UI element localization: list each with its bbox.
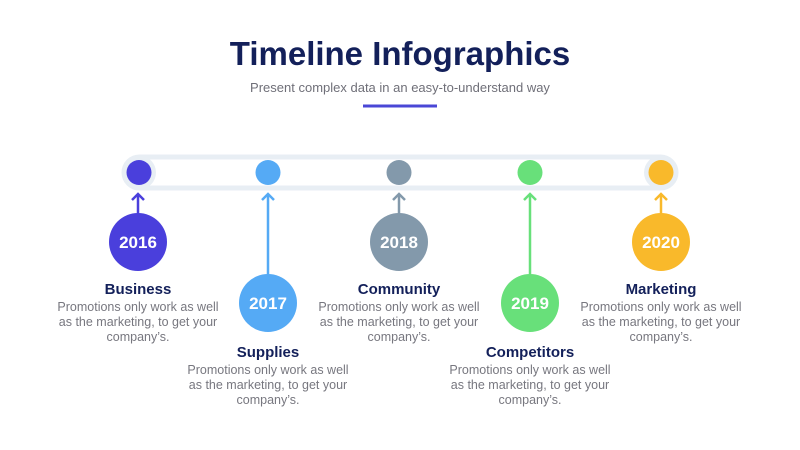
milestone 2016: Business: Promotions only work as well [57,300,219,314]
milestone 2018: Community: Community [358,281,441,298]
milestone 2020: Marketing: 2020 [642,233,680,252]
milestone 2018: Community: 2018 [380,233,418,252]
milestone 2019: Competitors: company’s. [498,393,562,407]
milestone 2020: Marketing: company’s. [630,330,692,344]
milestone 2020: Marketing [580,160,742,344]
milestone 2017: Supplies: Supplies [237,344,299,361]
milestone 2019: Competitors: Promotions only work as well [449,363,611,377]
timeline track [122,156,678,190]
milestone 2017: Supplies: 2017 [249,294,287,313]
milestone 2018: Community [318,160,480,344]
milestone 2020: Marketing: Promotions only work as well [580,300,742,314]
milestone 2016: Business: company’s. [106,330,170,344]
subtitle: Present complex data in an easy-to-understand way [250,80,550,95]
milestone 2017: Supplies [187,160,349,407]
milestone 2019: Competitors [449,160,611,407]
title: Timeline Infographics [230,35,570,72]
title underline [363,104,437,108]
milestone 2016: Business: Business [105,281,171,298]
milestone 2017: Supplies: company’s. [236,393,300,407]
milestone 2016: Business: as the marketing, to get your [59,315,217,329]
milestone 2016: Business: 2016 [119,233,157,252]
milestone 2017: Supplies: as the marketing, to get your [189,378,347,392]
milestone 2018: Community: company’s. [368,330,430,344]
milestone 2019: Competitors: 2019 [511,294,549,313]
milestone 2020: Marketing: Marketing [626,281,696,298]
milestone 2019: Competitors: as the marketing, to get your [451,378,609,392]
milestone 2016: Business [57,160,219,344]
milestone 2018: Community: Promotions only work as well [318,300,480,314]
milestone 2019: Competitors: Competitors [486,344,574,361]
milestone 2017: Supplies: Promotions only work as well [187,363,349,377]
milestone 2018: Community: as the marketing, to get your [320,315,478,329]
milestone 2020: Marketing: as the marketing, to get your [582,315,740,329]
